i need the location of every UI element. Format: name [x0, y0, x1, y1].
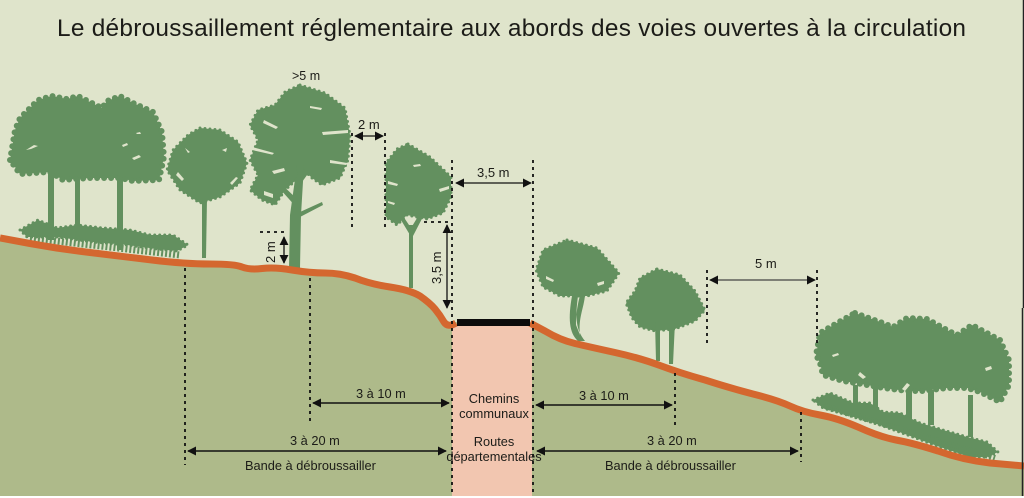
label: road types: départementales [446, 449, 542, 464]
dimension: right 3 à 10 m [536, 388, 672, 405]
tree: double-trunk tree [626, 269, 705, 364]
road verge: pink band [452, 326, 532, 496]
ground [0, 238, 1024, 496]
tree: small tree left [167, 128, 247, 258]
dotted guide lines [185, 133, 817, 496]
dimension: 3,5 m height [429, 225, 447, 308]
dimension: 3,5 m width: 3,5 m [477, 165, 510, 180]
label: road types: communaux [459, 406, 529, 421]
dimension: 2 m between crowns: 2 m [358, 117, 380, 132]
dimension: 3,5 m width [456, 165, 531, 183]
tree group: left cluster with undergrowth [10, 96, 188, 255]
tree: rounded tree right of road [536, 240, 619, 341]
label: left strip: Bande à débroussailler [245, 458, 377, 473]
dimension: left 3 à 20 m: 3 à 20 m [290, 433, 340, 448]
label: road types: Routes [474, 434, 514, 449]
dimension: 2 m trunk height: 2 m [263, 241, 278, 263]
image border [1022, 0, 1024, 496]
title: Le débroussaillement réglementaire aux abords des voies ouvertes à la circulation [57, 15, 966, 42]
dimension: right 3 à 10 m: 3 à 10 m [579, 388, 629, 403]
tree group: right cluster with undergrowth [813, 313, 1009, 458]
label: road types [446, 391, 542, 464]
dimension: right 3 à 20 m: 3 à 20 m [647, 433, 697, 448]
dimension: 5 m spacing: 5 m [755, 256, 777, 271]
dimension: left 3 à 10 m [313, 386, 449, 403]
tree: pruned tree near road [386, 144, 451, 288]
dimension: left 3 à 10 m: 3 à 10 m [356, 386, 406, 401]
terrain line left of road [0, 238, 456, 325]
label: tree height: >5 m [292, 69, 320, 83]
dimension: 5 m spacing [710, 256, 815, 280]
terrain line right of road [530, 323, 1024, 466]
tree: tall pine [250, 85, 350, 268]
dimension: 2 m between crowns [355, 117, 383, 136]
label: right strip: Bande à débroussailler [605, 458, 737, 473]
label: road types: Chemins [469, 391, 519, 406]
dimension: 3,5 m height: 3,5 m [429, 251, 444, 284]
dimension: 2 m trunk height [263, 237, 284, 263]
road surface [457, 319, 530, 326]
